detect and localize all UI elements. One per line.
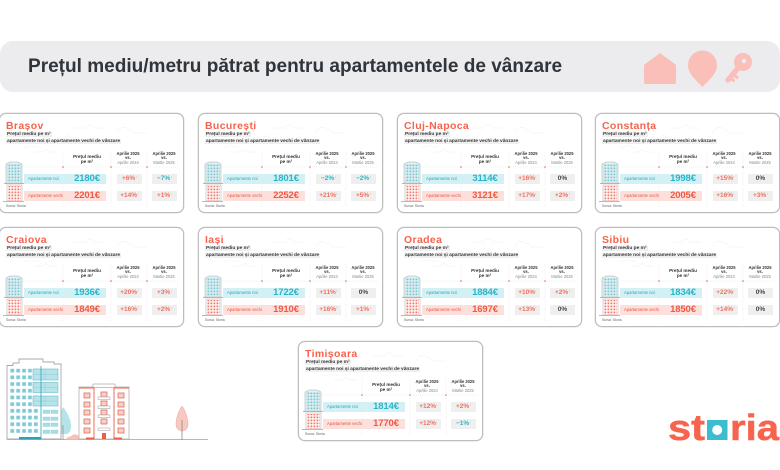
- column header: annual: [712, 151, 736, 165]
- bar: old apartments: [422, 305, 504, 315]
- bar: new apartments: [223, 174, 305, 184]
- price old: 2252€: [273, 190, 299, 201]
- column header: monthly: vs.: [559, 269, 565, 274]
- change: +15%↑: [716, 175, 735, 182]
- illustration: buildings and trees: [6, 358, 208, 440]
- price old: 2201€: [74, 190, 100, 201]
- change: [117, 288, 142, 298]
- column header: annual: [116, 265, 140, 279]
- price new: 1998€: [670, 173, 696, 184]
- change: [550, 305, 575, 315]
- price new: 1936€: [74, 287, 100, 298]
- label: new: Apartamente noi: [327, 404, 358, 409]
- price old: 1697€: [472, 304, 498, 315]
- change: [416, 402, 441, 412]
- column header: monthly: Aprilie 2025: [748, 151, 771, 156]
- column header: annual: vs.: [125, 269, 131, 274]
- change: +6%↑: [122, 175, 137, 182]
- price old: 3121€: [472, 190, 498, 201]
- column header: monthly: Aprilie 2025: [748, 265, 771, 270]
- column header: price: [669, 154, 697, 164]
- change: [515, 305, 540, 315]
- label: new: Apartamente noi: [426, 290, 457, 295]
- column header: monthly: vs.: [360, 155, 366, 160]
- column header: price: pe m²: [280, 159, 292, 164]
- subtitle: apartamente noi și apartamente vechi de vânzare: [7, 253, 120, 258]
- column header: monthly: Aprilie 2025: [352, 151, 374, 156]
- change: −2%↓: [356, 175, 371, 182]
- panel: Cluj-Napoca: [397, 113, 582, 213]
- subtitle: [205, 246, 320, 258]
- column header: monthly: [352, 265, 374, 279]
- label: new: Apartamente noi: [227, 176, 258, 181]
- ground line: [7, 439, 208, 440]
- change: [351, 174, 376, 184]
- column header: price: Prețul mediu: [669, 154, 697, 159]
- label: old: Apartamente vechi: [227, 193, 262, 198]
- price new: 1722€: [273, 287, 299, 298]
- bar: new apartments: [24, 174, 106, 184]
- change: [748, 191, 773, 201]
- column header: monthly: Aprilie 2025: [152, 265, 175, 270]
- column header: annual: Aprilie 2024: [713, 160, 735, 165]
- subtitle: Prețul mediu pe m²: [7, 132, 51, 137]
- panel: Brașov: [0, 113, 184, 213]
- change: −1%↓: [456, 420, 471, 427]
- change: [451, 419, 476, 429]
- column header: annual: Aprilie 2025: [116, 151, 139, 156]
- change: [152, 288, 177, 298]
- city name: Constanța: [602, 120, 656, 132]
- label: new: Apartamente noi: [227, 290, 258, 295]
- column header: monthly: Martie 2025: [352, 274, 374, 279]
- change: +16%↑: [120, 306, 139, 313]
- column header: annual: Aprilie 2025: [514, 151, 537, 156]
- column header: monthly: [748, 151, 772, 165]
- label: old: Apartamente vechi: [426, 193, 461, 198]
- column header: monthly: Aprilie 2025: [452, 379, 474, 384]
- column header: price: pe m²: [677, 159, 689, 164]
- change: 0%: [558, 306, 567, 313]
- label: new: Apartamente noi: [426, 176, 457, 181]
- change: [713, 191, 738, 201]
- column header: annual: Aprilie 2025: [316, 265, 338, 270]
- change: [316, 191, 341, 201]
- change: [316, 305, 341, 315]
- blue tree: [59, 407, 71, 440]
- price new: 1814€: [373, 401, 399, 412]
- label: new: Apartamente noi: [624, 290, 655, 295]
- change: +12%↑: [419, 420, 438, 427]
- label: old: Apartamente vechi: [624, 193, 659, 198]
- change: +14%↑: [120, 192, 139, 199]
- source: Sursa: Storia: [404, 204, 424, 208]
- subtitle: Prețul mediu pe m²: [306, 360, 350, 365]
- change: 0%: [558, 175, 567, 182]
- change: [152, 174, 177, 184]
- change: +5%↑: [356, 192, 371, 199]
- column header: monthly: Martie 2025: [749, 160, 771, 165]
- column header: price: [73, 154, 101, 164]
- bar: old apartments: [24, 305, 106, 315]
- change: [416, 419, 441, 429]
- column header: monthly: Martie 2025: [153, 160, 175, 165]
- column header: annual: vs.: [324, 155, 330, 160]
- price new: 2180€: [74, 173, 100, 184]
- header bar: [0, 41, 780, 92]
- change: +22%↑: [716, 289, 735, 296]
- change: [316, 288, 341, 298]
- subtitle: apartamente noi și apartamente vechi de vânzare: [7, 139, 120, 144]
- column header: annual: Aprilie 2024: [515, 274, 537, 279]
- change: [748, 288, 773, 298]
- logo: storia: [666, 405, 780, 445]
- change: [515, 174, 540, 184]
- column header: annual: Aprilie 2024: [515, 160, 537, 165]
- change: −2%↓: [321, 175, 336, 182]
- subtitle: Prețul mediu pe m²: [7, 246, 51, 251]
- column header: annual: [514, 265, 538, 279]
- subtitle: Prețul mediu pe m²: [405, 132, 449, 137]
- column header: price: pe m²: [479, 273, 491, 278]
- change: [152, 191, 177, 201]
- column header: price: [372, 382, 400, 392]
- column header: monthly: Martie 2025: [749, 274, 771, 279]
- column header: monthly: vs.: [161, 155, 167, 160]
- change: +16%↑: [716, 192, 735, 199]
- change: [550, 191, 575, 201]
- city name: București: [205, 120, 257, 132]
- subtitle: [404, 246, 519, 258]
- change: +2%↑: [555, 289, 570, 296]
- column header: price: [272, 268, 300, 278]
- change: [550, 174, 575, 184]
- source: Sursa: Storia: [205, 204, 225, 208]
- column header: price: [471, 154, 499, 164]
- change: +13%↑: [518, 306, 537, 313]
- source: Sursa: Storia: [404, 318, 424, 322]
- change: +16%↑: [319, 306, 338, 313]
- subtitle: apartamente noi și apartamente vechi de vânzare: [206, 253, 319, 258]
- column header: annual: Aprilie 2024: [713, 274, 735, 279]
- subtitle: apartamente noi și apartamente vechi de vânzare: [206, 139, 319, 144]
- bar: new apartments: [422, 174, 504, 184]
- price new: 1801€: [273, 173, 299, 184]
- subtitle: [305, 360, 420, 372]
- column header: price: Prețul mediu: [73, 268, 101, 273]
- apartment block: [79, 384, 129, 440]
- column header: monthly: Martie 2025: [551, 274, 573, 279]
- bar: new apartments: [323, 402, 405, 412]
- column header: price: Prețul mediu: [272, 154, 300, 159]
- panel: Sibiu: [595, 227, 780, 327]
- source: Sursa: Storia: [205, 318, 225, 322]
- subtitle: Prețul mediu pe m²: [206, 132, 250, 137]
- column header: monthly: vs.: [757, 269, 763, 274]
- column header: monthly: Aprilie 2025: [152, 151, 175, 156]
- subtitle: Prețul mediu pe m²: [206, 246, 250, 251]
- column header: annual: Aprilie 2025: [116, 265, 139, 270]
- column header: price: pe m²: [81, 273, 93, 278]
- column header: annual: [116, 151, 140, 165]
- change: [713, 288, 738, 298]
- source: Sursa: Storia: [305, 432, 325, 436]
- column header: monthly: [352, 151, 374, 165]
- column header: monthly: Martie 2025: [551, 160, 573, 165]
- change: +11%↑: [319, 289, 338, 296]
- label: old: Apartamente vechi: [624, 307, 659, 312]
- column header: annual: [316, 151, 338, 165]
- change: +21%↑: [319, 192, 338, 199]
- column header: monthly: vs.: [161, 269, 167, 274]
- subtitle: apartamente noi și apartamente vechi de vânzare: [603, 139, 716, 144]
- change: +20%↑: [120, 289, 139, 296]
- subtitle: apartamente noi și apartamente vechi de vânzare: [306, 367, 419, 372]
- column header: annual: Aprilie 2025: [514, 265, 537, 270]
- tower building: [7, 359, 61, 440]
- bar: old apartments: [24, 191, 106, 201]
- change: +3%↑: [157, 289, 172, 296]
- source: Sursa: Storia: [602, 204, 622, 208]
- change: [451, 402, 476, 412]
- label: old: Apartamente vechi: [426, 307, 461, 312]
- column header: monthly: [152, 151, 176, 165]
- change: [748, 305, 773, 315]
- bar: new apartments: [223, 288, 305, 298]
- subtitle: apartamente noi și apartamente vechi de vânzare: [405, 139, 518, 144]
- icon: key: [725, 53, 752, 83]
- panel: București: [198, 113, 383, 213]
- price old: 1910€: [273, 304, 299, 315]
- city name: Sibiu: [602, 234, 629, 246]
- column header: monthly: [550, 151, 574, 165]
- change: +17%↑: [518, 192, 537, 199]
- bar: old apartments: [223, 305, 305, 315]
- price new: 3114€: [472, 173, 498, 184]
- column header: annual: Aprilie 2025: [416, 379, 438, 384]
- change: [117, 174, 142, 184]
- column header: annual: [416, 379, 438, 393]
- subtitle: apartamente noi și apartamente vechi de vânzare: [405, 253, 518, 258]
- label: old: Apartamente vechi: [327, 421, 362, 426]
- column header: annual: vs.: [721, 269, 727, 274]
- change: +2%↑: [456, 403, 471, 410]
- column header: monthly: Aprilie 2025: [550, 151, 573, 156]
- column header: price: Prețul mediu: [372, 382, 400, 387]
- bar: new apartments: [24, 288, 106, 298]
- city name: Timișoara: [305, 348, 358, 360]
- bar: old apartments: [223, 191, 305, 201]
- change: [351, 305, 376, 315]
- icon: house: [644, 53, 676, 84]
- column header: annual: Aprilie 2025: [712, 265, 735, 270]
- column header: annual: vs.: [721, 155, 727, 160]
- column header: annual: vs.: [523, 155, 529, 160]
- bar: old apartments: [620, 191, 702, 201]
- source: Sursa: Storia: [6, 204, 26, 208]
- column header: annual: vs.: [424, 383, 430, 388]
- change: −7%↓: [157, 175, 172, 182]
- label: old: Apartamente vechi: [227, 307, 262, 312]
- city name: Craiova: [6, 234, 47, 246]
- change: 0%: [756, 175, 765, 182]
- bar: new apartments: [422, 288, 504, 298]
- source: Sursa: Storia: [602, 318, 622, 322]
- column header: annual: [316, 265, 338, 279]
- change: [316, 174, 341, 184]
- change: 0%: [756, 306, 765, 313]
- subtitle: [404, 132, 519, 144]
- subtitle: Prețul mediu pe m²: [603, 246, 647, 251]
- price old: 1850€: [670, 304, 696, 315]
- column header: annual: [712, 265, 736, 279]
- subtitle: [602, 246, 717, 258]
- column header: annual: vs.: [324, 269, 330, 274]
- column header: monthly: [452, 379, 474, 393]
- column header: price: Prețul mediu: [73, 154, 101, 159]
- column header: price: pe m²: [81, 159, 93, 164]
- change: [550, 288, 575, 298]
- column header: monthly: Martie 2025: [153, 274, 175, 279]
- subtitle: [602, 132, 717, 144]
- bar: new apartments: [620, 174, 702, 184]
- change: [713, 174, 738, 184]
- price old: 1770€: [373, 418, 399, 429]
- column header: price: pe m²: [280, 273, 292, 278]
- column header: price: pe m²: [380, 387, 392, 392]
- column header: price: [73, 268, 101, 278]
- change: +1%↑: [157, 192, 172, 199]
- subtitle: Prețul mediu pe m²: [405, 246, 449, 251]
- column header: annual: Aprilie 2024: [316, 160, 338, 165]
- change: [117, 305, 142, 315]
- source: Sursa: Storia: [6, 318, 26, 322]
- column header: price: Prețul mediu: [272, 268, 300, 273]
- change: +16%↑: [518, 175, 537, 182]
- column header: price: Prețul mediu: [471, 268, 499, 273]
- column header: monthly: Martie 2025: [352, 160, 374, 165]
- bar: old apartments: [620, 305, 702, 315]
- bar: old apartments: [422, 191, 504, 201]
- column header: annual: vs.: [523, 269, 529, 274]
- subtitle: [205, 132, 320, 144]
- bar: new apartments: [620, 288, 702, 298]
- change: 0%: [359, 289, 368, 296]
- price new: 1884€: [472, 287, 498, 298]
- column header: monthly: [748, 265, 772, 279]
- panel: Constanța: [595, 113, 780, 213]
- subtitle: [6, 132, 121, 144]
- change: [515, 191, 540, 201]
- label: new: Apartamente noi: [28, 290, 59, 295]
- pink tree: [176, 406, 188, 440]
- city name: Oradea: [404, 234, 442, 246]
- column header: price: [471, 268, 499, 278]
- city name: Iași: [205, 234, 224, 246]
- change: [351, 191, 376, 201]
- panel: Timișoara: [298, 341, 483, 441]
- change: [713, 305, 738, 315]
- bush: [66, 434, 81, 440]
- change: [117, 191, 142, 201]
- column header: monthly: Martie 2025: [452, 388, 474, 393]
- panel: Iași: [198, 227, 383, 327]
- bar: old apartments: [323, 419, 405, 429]
- city name: Brașov: [6, 120, 44, 132]
- column header: annual: [514, 151, 538, 165]
- column header: price: Prețul mediu: [471, 154, 499, 159]
- label: new: Apartamente noi: [28, 176, 59, 181]
- column header: annual: Aprilie 2024: [416, 388, 438, 393]
- column header: price: [669, 268, 697, 278]
- column header: annual: Aprilie 2025: [712, 151, 735, 156]
- label: old: Apartamente vechi: [28, 307, 63, 312]
- label: new: Apartamente noi: [624, 176, 655, 181]
- column header: price: pe m²: [677, 273, 689, 278]
- change: +2%↑: [555, 192, 570, 199]
- change: [351, 288, 376, 298]
- price new: 1834€: [670, 287, 696, 298]
- column header: monthly: vs.: [460, 383, 466, 388]
- column header: annual: Aprilie 2024: [117, 160, 139, 165]
- title: Prețul mediu/metru pătrat pentru apartamentele de vânzare: [28, 56, 562, 77]
- subtitle: apartamente noi și apartamente vechi de vânzare: [603, 253, 716, 258]
- price old: 1849€: [74, 304, 100, 315]
- change: +1%↑: [356, 306, 371, 313]
- panel: Oradea: [397, 227, 582, 327]
- column header: price: pe m²: [479, 159, 491, 164]
- change: +2%↑: [157, 306, 172, 313]
- change: +12%↑: [419, 403, 438, 410]
- change: +10%↑: [518, 289, 537, 296]
- subtitle: [6, 246, 121, 258]
- column header: monthly: vs.: [559, 155, 565, 160]
- panel: Craiova: [0, 227, 184, 327]
- city name: Cluj-Napoca: [404, 120, 469, 132]
- change: +3%↑: [753, 192, 768, 199]
- price old: 2005€: [670, 190, 696, 201]
- column header: monthly: [152, 265, 176, 279]
- change: [748, 174, 773, 184]
- column header: monthly: Aprilie 2025: [352, 265, 374, 270]
- column header: monthly: vs.: [757, 155, 763, 160]
- column header: price: Prețul mediu: [669, 268, 697, 273]
- column header: monthly: [550, 265, 574, 279]
- change: +14%↑: [716, 306, 735, 313]
- column header: price: [272, 154, 300, 164]
- change: [152, 305, 177, 315]
- column header: annual: Aprilie 2024: [117, 274, 139, 279]
- column header: monthly: Aprilie 2025: [550, 265, 573, 270]
- subtitle: Prețul mediu pe m²: [603, 132, 647, 137]
- column header: annual: vs.: [125, 155, 131, 160]
- change: 0%: [756, 289, 765, 296]
- column header: annual: Aprilie 2025: [316, 151, 338, 156]
- change: [515, 288, 540, 298]
- column header: annual: Aprilie 2024: [316, 274, 338, 279]
- column header: monthly: vs.: [360, 269, 366, 274]
- icon: map pin: [688, 50, 717, 87]
- label: old: Apartamente vechi: [28, 193, 63, 198]
